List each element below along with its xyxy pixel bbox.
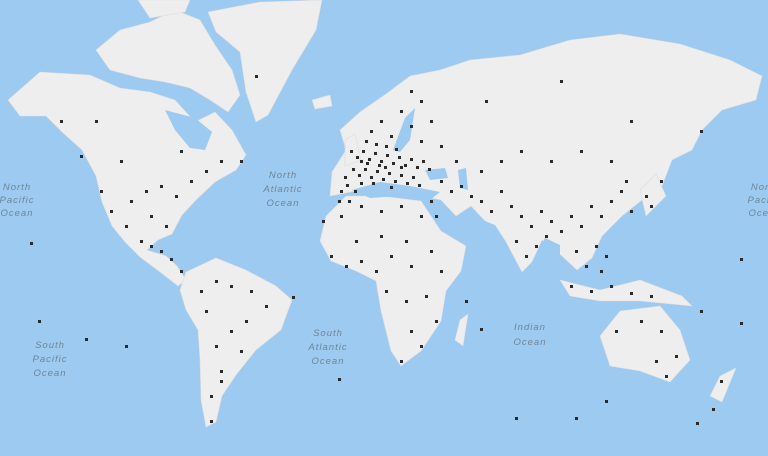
ocean labels: Ocean	[514, 337, 546, 348]
ocean labels: Indian	[514, 322, 546, 333]
ocean labels	[0, 170, 768, 379]
ocean labels: Pacific	[0, 195, 34, 206]
ocean labels: Atlantic	[307, 342, 348, 353]
ocean labels: Ocean	[312, 356, 344, 367]
ocean labels: North	[3, 182, 31, 193]
location dots	[30, 75, 743, 425]
ocean labels: South	[35, 340, 65, 351]
ocean labels: Ocean	[266, 198, 300, 209]
ocean labels: North	[269, 170, 297, 181]
ocean labels: Atlantic	[262, 184, 303, 195]
inland seas	[165, 108, 560, 265]
ocean labels: Ocean	[34, 368, 66, 379]
ocean labels: Pacific	[33, 354, 67, 365]
ocean labels: South	[313, 328, 343, 339]
ocean labels: Ocean	[0, 208, 34, 219]
